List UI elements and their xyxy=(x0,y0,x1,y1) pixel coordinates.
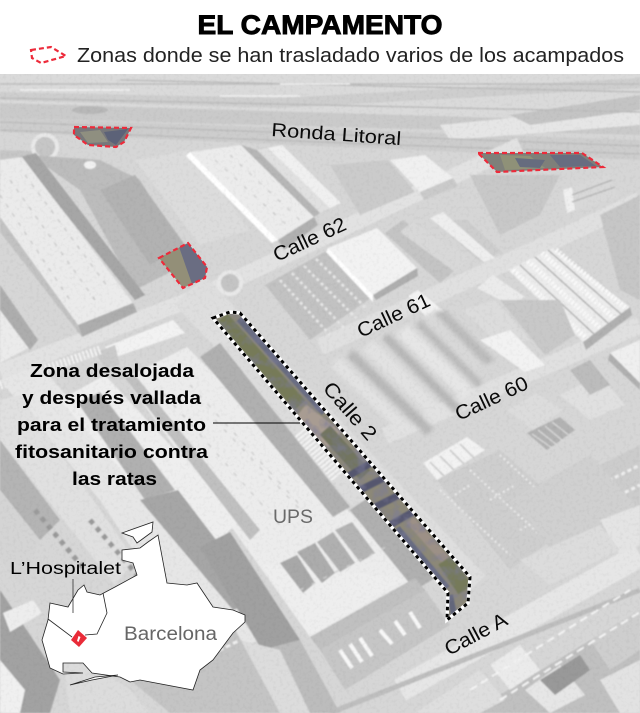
map: municipal border xyxy=(48,593,107,637)
right striped warehouses xyxy=(508,248,630,342)
lower left buildings xyxy=(0,365,260,660)
label: Ronda Litoral: Ronda Litoral xyxy=(271,120,402,150)
red zone: right of Ronda Litoral xyxy=(478,153,603,172)
left warehouse xyxy=(0,157,133,325)
label: Calle A: Calle A xyxy=(441,609,512,660)
top warehouses xyxy=(190,145,314,240)
map: harbour breakwater xyxy=(70,675,118,685)
arched hangars xyxy=(332,310,495,433)
locator map xyxy=(10,522,245,690)
roads xyxy=(0,145,520,372)
callout: Zona desalojada: Zona desalojada xyxy=(30,360,195,381)
map label: L'Hospitalet: L’Hospitalet xyxy=(10,558,121,578)
legend icon: red dashed zone xyxy=(31,47,66,63)
road strip under buildings xyxy=(105,320,185,358)
dark plots upper left xyxy=(38,155,170,288)
UPS warehouse xyxy=(125,347,415,637)
title: EL CAMPAMENTO xyxy=(198,10,442,40)
callout: Zona desalojada xyxy=(15,360,209,489)
map: island shape xyxy=(122,522,153,543)
label: Calle 2: Calle 2 xyxy=(318,378,381,445)
black zone: Calle 2 strip xyxy=(205,305,475,625)
map: Barcelona and L'Hospitalet outline xyxy=(42,535,245,690)
label: UPS: UPS xyxy=(273,507,313,528)
red zone: left of Ronda Litoral xyxy=(74,127,131,147)
legend text: Zonas donde se han trasladado varios de los acampados xyxy=(77,45,624,67)
bottom right yard xyxy=(482,640,640,713)
callout: Zona desalojada: y después vallada xyxy=(22,387,202,408)
legend xyxy=(31,45,624,67)
label: Calle 62: Calle 62 xyxy=(270,214,350,267)
map label: Barcelona: Barcelona xyxy=(124,624,217,645)
callout leader line xyxy=(213,422,300,424)
callout: Zona desalojada: fitosanitario contra xyxy=(15,441,209,462)
central warehouses xyxy=(265,250,372,340)
map leader line xyxy=(72,579,74,613)
lower right industrial xyxy=(562,386,624,419)
label: Calle 61: Calle 61 xyxy=(354,290,434,343)
callout: Zona desalojada: para el tratamiento xyxy=(17,414,206,435)
label: Calle 60: Calle 60 xyxy=(452,373,532,426)
map: red location marker xyxy=(71,630,87,647)
street labels xyxy=(270,120,532,660)
red zone: near Calle 62 roundabout xyxy=(159,240,212,288)
callout: Zona desalojada: las ratas xyxy=(72,468,157,489)
